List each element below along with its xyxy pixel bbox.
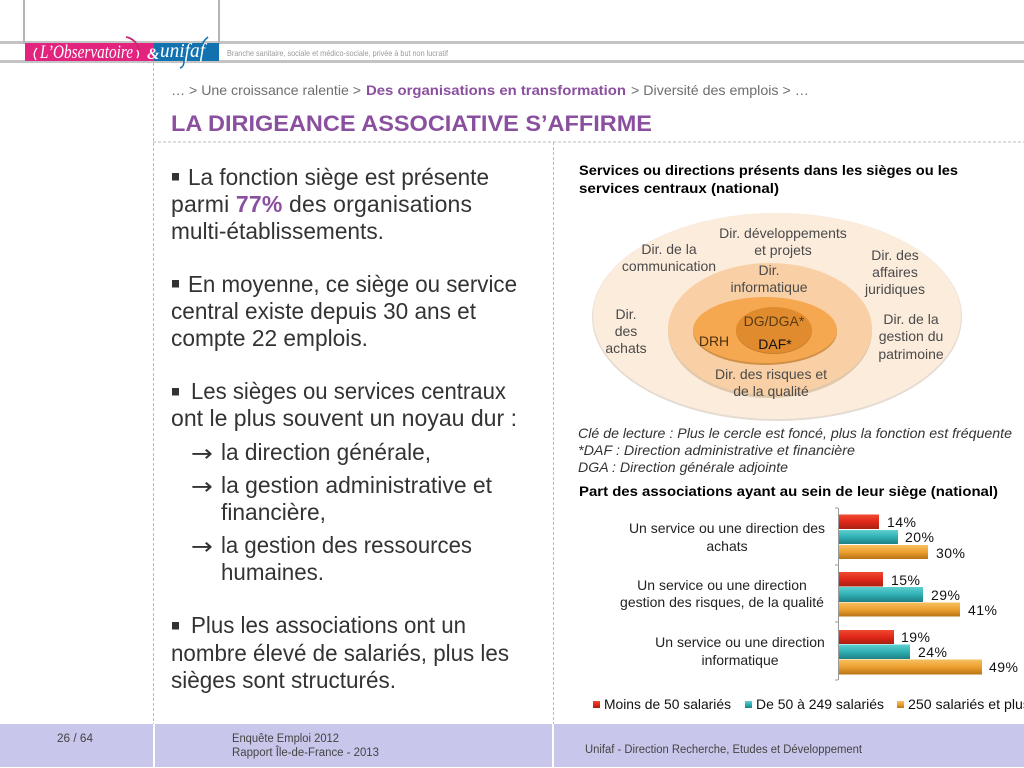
reading key: *DAF : Direction administrative et financière [578, 442, 855, 458]
category labels: achats [706, 538, 748, 554]
bullet 3: → [191, 474, 213, 500]
bullet 4: sièges sont structurés. [171, 667, 396, 693]
middle ring labels: Dir. [758, 262, 780, 278]
bullet 3 [171, 378, 517, 585]
bullet 4: nombre élevé de salariés, plus les [171, 640, 509, 666]
axis [835, 508, 838, 680]
bullet 2 [171, 271, 517, 351]
outer ring labels: achats [605, 340, 647, 356]
inner ring labels: DG/DGA* [744, 313, 805, 329]
category labels: Un service ou une direction des [629, 520, 825, 536]
outer ring labels: communication [622, 258, 716, 274]
legend [593, 696, 1024, 712]
group 3 bars: 49% [989, 659, 1018, 675]
bullet 1 [171, 164, 489, 244]
logo: L'Observatoire & unifaf: & [147, 46, 160, 63]
outer ring labels [605, 225, 944, 362]
legend: De 50 à 249 salariés [756, 696, 884, 712]
heading: services ou directions [579, 163, 958, 196]
outer ring labels: gestion du [879, 328, 943, 344]
group 1 bars: 20% [905, 529, 934, 545]
report info: Enquête Emploi 2012 [232, 733, 339, 745]
group 3 bars: 24% [918, 644, 947, 660]
group 3 bars: 19% [901, 629, 930, 645]
breadcrumb [171, 82, 809, 98]
bullet 2: compte 22 emplois. [171, 325, 368, 351]
footer [0, 724, 1024, 768]
logo: L'Observatoire & unifaf: L’Observatoire [39, 42, 133, 63]
page number: 26 / 64 [57, 733, 94, 745]
group 2 bars [839, 572, 997, 618]
group 1 bars [839, 514, 965, 561]
bullet 3: la direction générale, [221, 439, 431, 465]
category labels [620, 520, 825, 668]
group 2 bars: 29% [931, 587, 960, 603]
group 2 bars: 41% [968, 602, 997, 618]
header band [0, 0, 1024, 68]
reading key: DGA : Direction générale adjointe [578, 459, 788, 475]
heading: services ou directions: Services ou directions présents dans les sièges ou les [579, 163, 958, 178]
heading: services ou directions: services centraux (national) [579, 181, 779, 196]
breadcrumb: > Diversité des emplois > … [631, 82, 809, 98]
bullet 4: Plus les associations ont un [191, 612, 466, 638]
category labels: Un service ou une direction [655, 634, 825, 650]
breadcrumb: … > Une croissance ralentie > [171, 82, 361, 98]
source: Unifaf - Direction Recherche, Etudes et Développement [585, 744, 863, 756]
outer ring labels: Dir. [616, 306, 636, 322]
bullet 4 [171, 612, 509, 693]
bullet 1: multi-établissements. [171, 218, 384, 244]
outer ring labels: affaires [872, 264, 918, 280]
bar chart [593, 508, 1024, 712]
bullet 1: La fonction siège est présente [188, 164, 489, 190]
inner ring labels: DAF* [758, 336, 792, 352]
inner ring labels: DRH [699, 333, 729, 349]
dashed layout lines [153, 63, 1024, 724]
heading: part des associations: Part des associations ayant au sein de leur siège (national) [579, 484, 998, 499]
category labels: informatique [701, 652, 779, 668]
breadcrumb: Des organisations en transformation [366, 82, 626, 98]
bullet 3: humaines. [221, 559, 324, 585]
title: LA DIRIGEANCE ASSOCIATIVE S’AFFIRME [171, 111, 652, 136]
report info: Rapport Île-de-France - 2013 [232, 746, 379, 759]
outer ring labels: juridiques [864, 281, 925, 297]
report info [232, 733, 379, 759]
logo: L'Observatoire & unifaf: unifaf [160, 40, 207, 62]
bullet 3: la gestion des ressources [221, 532, 472, 558]
group 1 bars: 30% [936, 545, 965, 561]
category labels: Un service ou une direction [637, 577, 807, 593]
bullet 3: la gestion administrative et [221, 472, 493, 498]
nested ellipse diagram [592, 213, 962, 421]
group 1 bars: 14% [887, 514, 916, 530]
inner ring labels [699, 313, 805, 352]
bullet 3: → [191, 534, 213, 560]
left text block [171, 164, 517, 693]
reading key: Clé de lecture : Plus le cercle est foncé, plus la fonction est fréquente [578, 425, 1012, 441]
legend: Moins de 50 salariés [604, 696, 731, 712]
outer ring labels: Dir. des [871, 247, 919, 263]
middle ring labels [715, 262, 827, 399]
bullet 3: ont le plus souvent un noyau dur : [171, 405, 517, 431]
group 2 bars: 15% [891, 572, 920, 588]
logo: L'Observatoire & unifaf [25, 37, 219, 68]
group 3 bars [839, 629, 1018, 675]
reading key [578, 425, 1012, 475]
outer ring labels: patrimoine [878, 346, 944, 362]
outer ring labels: Dir. de la [641, 241, 697, 257]
middle ring labels: informatique [730, 279, 808, 295]
outer ring labels: et projets [754, 242, 812, 258]
outer ring labels: des [615, 323, 637, 339]
bullet 3: → [191, 441, 213, 467]
middle ring labels: de la qualité [733, 383, 809, 399]
bullet 3: Les sièges ou services centraux [191, 378, 506, 404]
outer ring labels: Dir. de la [883, 311, 939, 327]
tagline: Branche sanitaire, sociale et médico-sociale, privée à but non lucratif [227, 48, 449, 58]
category labels: gestion des risques, de la qualité [620, 594, 824, 610]
bullet 2: En moyenne, ce siège ou service [188, 271, 517, 297]
outer ring labels: Dir. développements [719, 225, 847, 241]
bullet 3: financière, [221, 499, 326, 525]
middle ring labels: Dir. des risques et [715, 366, 827, 382]
bullet 1: parmi 77% des organisations [171, 191, 472, 217]
bullet 2: central existe depuis 30 ans et [171, 298, 477, 324]
